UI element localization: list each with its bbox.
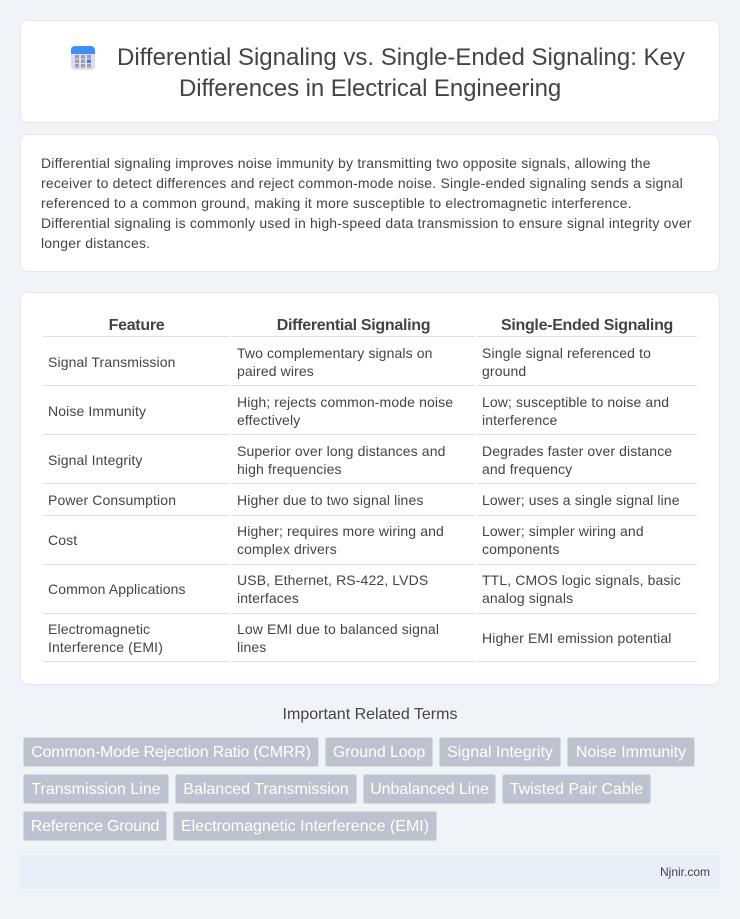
intro text: receiver to detect differences and reject common-mode noise. Single-ended signaling sends a signal: [41, 175, 683, 191]
tag: [439, 737, 561, 767]
tag: Electromagnetic Interference (EMI): [181, 818, 429, 835]
row: cost: Cost: [48, 532, 77, 548]
comparison table: Lower; uses a single signal line: [482, 492, 680, 508]
footer bar: [20, 855, 720, 889]
comparison table: paired wires: [237, 363, 314, 379]
comparison table: components: [482, 541, 559, 557]
comparison table: Low; susceptible to noise and: [482, 394, 669, 410]
comparison table: interfaces: [237, 590, 299, 606]
tag: Signal Integrity: [447, 744, 553, 761]
row: noise immunity: Noise Immunity: [48, 403, 146, 419]
comparison table: Higher EMI emission potential: [482, 630, 671, 646]
intro text: referenced to a common ground, making it more susceptible to electromagnetic interference.: [41, 195, 632, 211]
footer credit: Njnir.com: [660, 865, 710, 879]
comparison table: high frequencies: [237, 461, 342, 477]
comparison table: effectively: [237, 412, 300, 428]
tag: Common-Mode Rejection Ratio (CMRR): [31, 744, 311, 761]
comparison table: interference: [482, 412, 557, 428]
icon: calendar: [71, 46, 95, 70]
comparison table: USB, Ethernet, RS-422, LVDS: [237, 572, 428, 588]
comparison table: [43, 317, 697, 662]
intro text: longer distances.: [41, 235, 150, 251]
tag: [23, 737, 319, 767]
intro card: [20, 134, 720, 272]
header card: [20, 20, 720, 123]
comparison table: Lower; simpler wiring and: [482, 523, 644, 539]
column heading: single-ended: Single-Ended Signaling: [501, 317, 673, 334]
row: common applications: Common Applications: [48, 581, 186, 597]
comparison table: Superior over long distances and: [237, 443, 446, 459]
comparison table: analog signals: [482, 590, 573, 606]
tag: Balanced Transmission: [183, 781, 349, 798]
column heading: differential: Differential Signaling: [277, 317, 430, 334]
row: signal integrity: Signal Integrity: [48, 452, 143, 468]
row: EMI: [48, 621, 163, 655]
tag: Noise Immunity: [576, 744, 686, 761]
comparison table: Higher due to two signal lines: [237, 492, 423, 508]
related terms heading: Important Related Terms: [283, 706, 457, 723]
tag: Twisted Pair Cable: [510, 781, 643, 798]
row: EMI: Interference (EMI): [48, 639, 163, 655]
row: signal transmission: Signal Transmission: [48, 354, 176, 370]
tag: [325, 737, 433, 767]
comparison table: Higher; requires more wiring and: [237, 523, 444, 539]
tag: [23, 811, 167, 841]
tag: [23, 774, 169, 804]
column heading: feature: Feature: [109, 317, 164, 334]
comparison table: Single signal referenced to: [482, 345, 651, 361]
comparison table: TTL, CMOS logic signals, basic: [482, 572, 681, 588]
comparison table: complex drivers: [237, 541, 337, 557]
comparison table: Degrades faster over distance: [482, 443, 672, 459]
comparison table: High; rejects common-mode noise: [237, 394, 453, 410]
comparison table: Low EMI due to balanced signal: [237, 621, 439, 637]
title: Differences in Electrical Engineering: [179, 75, 561, 102]
intro text: Differential signaling improves noise immunity by transmitting two opposite signals, allowing the: [41, 155, 651, 171]
table card: [20, 292, 720, 685]
tag: Reference Ground: [31, 818, 159, 835]
tag: [363, 774, 496, 804]
related term tags: [23, 737, 695, 841]
tag: [567, 737, 695, 767]
comparison table: lines: [237, 639, 266, 655]
tag: Unbalanced Line: [370, 781, 489, 798]
tag: [502, 774, 651, 804]
tag: Transmission Line: [31, 781, 161, 798]
comparison table: ground: [482, 363, 526, 379]
intro text: Differential signaling is commonly used in high-speed data transmission to ensure signal integrity over: [41, 215, 692, 231]
tag: Ground Loop: [333, 744, 425, 761]
row: power consumption: Power Consumption: [48, 492, 176, 508]
title: [117, 44, 685, 102]
tag: [173, 811, 437, 841]
row: EMI: Electromagnetic: [48, 621, 150, 637]
comparison table: Two complementary signals on: [237, 345, 433, 361]
tag: [175, 774, 357, 804]
title: Differential Signaling vs. Single-Ended Signaling: Key: [117, 44, 685, 71]
intro text: [41, 155, 692, 251]
comparison table: and frequency: [482, 461, 572, 477]
